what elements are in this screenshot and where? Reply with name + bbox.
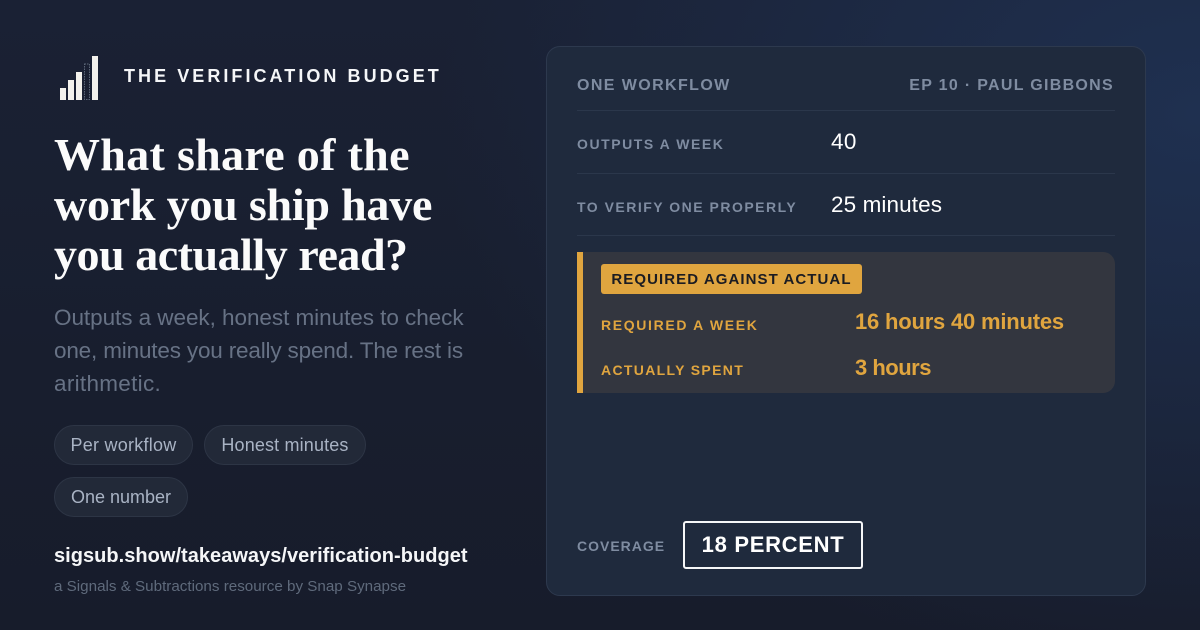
badge: required against actual bbox=[601, 264, 862, 294]
url: sigsub.show/takeaways/verification-budget bbox=[54, 545, 468, 567]
panel: required against actual bbox=[577, 252, 1115, 393]
chip: one number bbox=[54, 477, 188, 517]
chip: honest minutes bbox=[204, 425, 366, 465]
row label: to verify one properly: TO VERIFY ONE PROPERLY bbox=[577, 199, 797, 215]
coverage label: COVERAGE bbox=[577, 538, 665, 554]
badge: required against actual: REQUIRED AGAINST ACTUAL bbox=[611, 271, 852, 288]
chip: honest minutes: Honest minutes bbox=[221, 435, 349, 455]
row label: actually spent: ACTUALLY SPENT bbox=[601, 362, 744, 378]
row value: 25 minutes: 25 minutes bbox=[831, 192, 942, 217]
main heading: you actually read? bbox=[54, 229, 408, 280]
coverage value box: 18 PERCENT bbox=[702, 532, 844, 557]
main heading: What share of the bbox=[54, 129, 410, 180]
row value: 40: 40 bbox=[831, 129, 857, 154]
card header left: ONE WORKFLOW bbox=[577, 77, 731, 94]
subheading: one, minutes you really spend. The rest is bbox=[54, 338, 463, 363]
panel: one workflow card bbox=[546, 46, 1146, 596]
row label: required a week: REQUIRED A WEEK bbox=[601, 317, 758, 333]
main heading bbox=[54, 129, 432, 280]
row value: 3 hours: 3 hours bbox=[855, 355, 931, 380]
coverage value box bbox=[683, 521, 863, 569]
row label: outputs a week: OUTPUTS A WEEK bbox=[577, 136, 724, 152]
icon: bar chart logo bbox=[60, 56, 98, 100]
card header right: EP 10 · PAUL GIBBONS bbox=[909, 77, 1114, 94]
subheading bbox=[54, 305, 464, 396]
brand title: THE VERIFICATION BUDGET bbox=[124, 66, 442, 86]
chip: per workflow bbox=[54, 425, 193, 465]
chip: one number: One number bbox=[71, 487, 171, 507]
main heading: work you ship have bbox=[54, 179, 432, 230]
attribution: a Signals & Subtractions resource by Snap Synapse bbox=[54, 578, 406, 595]
chip: per workflow: Per workflow bbox=[70, 435, 177, 455]
subheading: Outputs a week, honest minutes to check bbox=[54, 305, 464, 330]
subheading: arithmetic. bbox=[54, 371, 161, 396]
row value: 16 hours 40 minutes: 16 hours 40 minutes bbox=[855, 309, 1064, 334]
